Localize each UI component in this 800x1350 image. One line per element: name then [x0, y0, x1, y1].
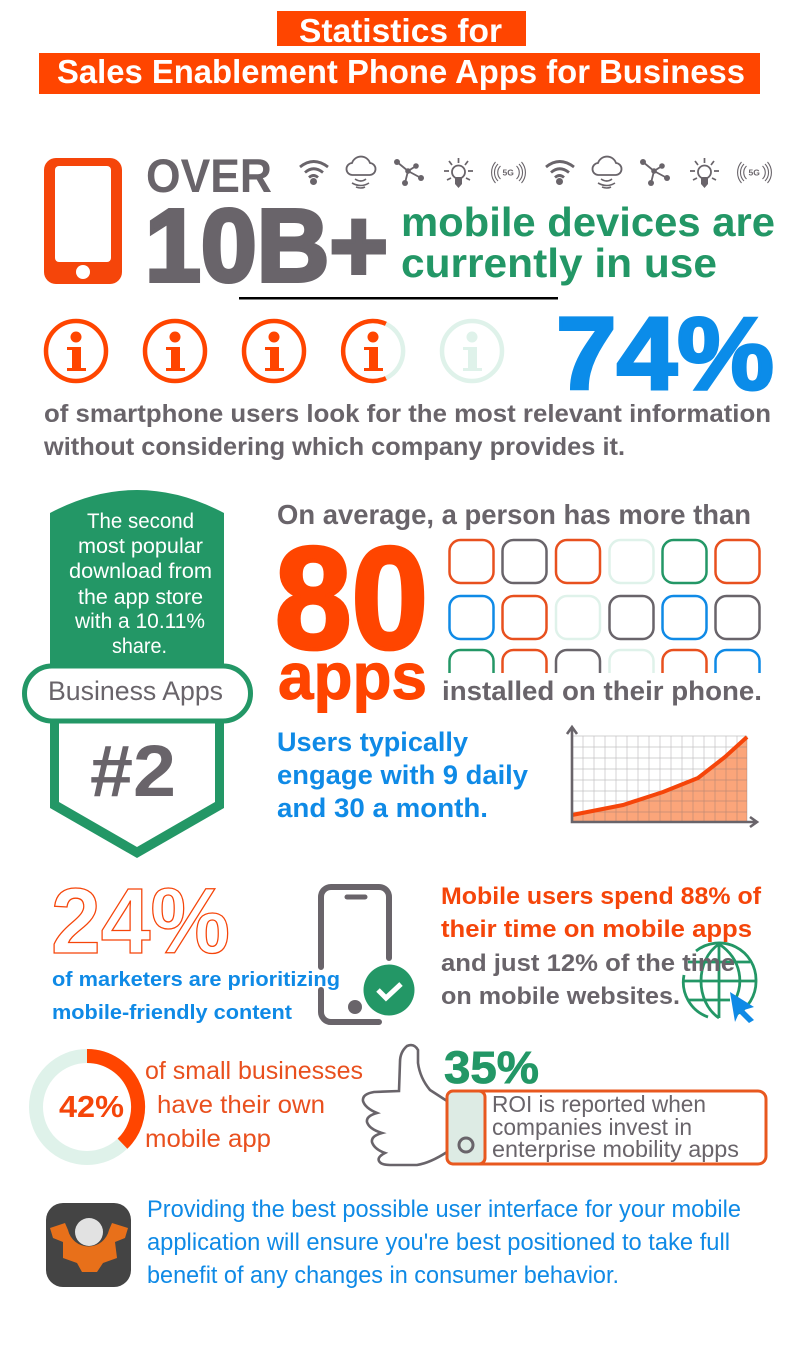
text: time on apps vs websites: and just 12% of the time: [441, 950, 735, 977]
icon: thumbs up: [363, 1045, 766, 1165]
text: closing advice: benefit of any changes in consumer behavior.: [147, 1262, 619, 1289]
text: installed on their phone: installed on their phone.: [442, 676, 762, 706]
text: users typically engage: and 30 a month.: [277, 793, 488, 823]
stat: 80 apps: apps: [278, 639, 427, 713]
title: Statistics for: [299, 12, 502, 49]
text: ROI reported: companies invest in: [492, 1114, 692, 1140]
text: smartphone users: without considering which company provides it.: [43, 433, 625, 461]
text: users typically engage: [277, 727, 528, 823]
text: mobile devices in use: currently in use: [401, 240, 717, 286]
panel: business apps badge: The second: [87, 510, 194, 533]
icon: orange smartphone: [44, 158, 122, 284]
stat: 24% outline: 24%: [51, 869, 230, 973]
panel: business apps badge: most popular: [78, 535, 203, 558]
stat: 74%: 74%: [556, 296, 774, 411]
text: small businesses: have their own: [157, 1091, 325, 1119]
text: smartphone users: [43, 400, 771, 461]
panel: business apps badge: share.: [112, 635, 167, 658]
app icon grid: [450, 540, 760, 673]
panel: business apps badge: Business Apps: [48, 676, 223, 706]
panel: business apps badge: download from: [69, 560, 212, 583]
text: smartphone users: of smartphone users look for the most relevant information: [44, 400, 771, 428]
text: marketers prioritizing: [52, 969, 340, 1024]
icon: gear app: [46, 1203, 131, 1287]
text: ROI reported: ROI is reported when: [492, 1091, 706, 1117]
stat: over 10B+: 10B+: [145, 188, 388, 303]
text: mobile devices in use: mobile devices are: [401, 199, 775, 245]
panel: business apps badge: [24, 490, 250, 858]
stat: 80 apps: 80: [275, 517, 428, 679]
chart: 42% donut: 42%: [59, 1089, 124, 1124]
connectivity icons row: [300, 157, 771, 188]
title: Sales Enablement Phone Apps for Business: [57, 53, 745, 90]
text: closing advice: application will ensure you're best positioned to take full: [147, 1229, 730, 1256]
text: small businesses: of small businesses: [145, 1057, 363, 1085]
text: closing advice: [147, 1196, 741, 1289]
panel: business apps badge: the app store: [78, 586, 203, 609]
text: time on apps vs websites: [441, 883, 762, 1010]
text: time on apps vs websites: on mobile websites.: [441, 983, 680, 1010]
text: ROI reported: [492, 1091, 739, 1162]
text: closing advice: Providing the best possible user interface for your mobile: [147, 1196, 741, 1223]
text: marketers prioritizing: mobile-friendly content: [52, 1002, 292, 1024]
stat: over 10B+: OVER: [146, 149, 272, 202]
stat: 35%: 35%: [444, 1042, 539, 1093]
title: [39, 11, 760, 94]
icons: information circles: [46, 321, 502, 381]
text: time on apps vs websites: their time on mobile apps: [441, 916, 752, 943]
text: ROI reported: enterprise mobility apps: [492, 1136, 739, 1162]
text: users typically engage: engage with 9 daily: [277, 760, 528, 790]
connectivity icons row: 5G: [502, 168, 514, 178]
text: small businesses: mobile app: [145, 1125, 271, 1153]
text: time on apps vs websites: Mobile users spend 88% of: [441, 883, 762, 910]
text: small businesses: [145, 1057, 363, 1153]
icon: phone with check: [321, 887, 414, 1022]
panel: business apps badge: #2: [90, 731, 176, 812]
icon: globe with cursor: [682, 943, 756, 1023]
text: on average: On average, a person has more than: [277, 499, 751, 530]
chart: 42% donut: [36, 1056, 138, 1158]
connectivity icons row: 5G: [748, 168, 760, 178]
chart: rising area chart: [567, 727, 757, 827]
text: marketers prioritizing: of marketers are prioritizing: [52, 969, 340, 991]
panel: business apps badge: with a 10.11%: [74, 610, 205, 633]
text: users typically engage: Users typically: [277, 727, 468, 757]
text: mobile devices in use: [401, 199, 775, 286]
